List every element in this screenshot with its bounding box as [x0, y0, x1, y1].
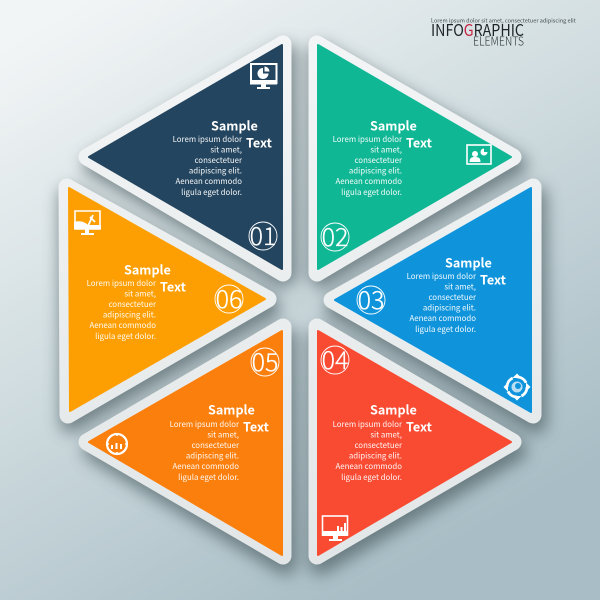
body text: [407, 271, 477, 335]
body text: consectetuer: [194, 155, 243, 166]
body text: Lorem ipsum dolor: [87, 278, 157, 289]
body text: sit amet,: [444, 282, 476, 293]
body text: Aenean commodo: [335, 176, 402, 187]
heading: Sample: [370, 116, 417, 134]
panel: 01 navy triangle: [87, 44, 283, 273]
body text: adipiscing elit.: [186, 451, 239, 462]
body text: [333, 134, 403, 198]
body text: Aenean commodo: [175, 176, 242, 187]
body text: sit amet,: [210, 145, 242, 156]
panel: 03 blue triangle: [332, 187, 533, 415]
header title: INFOGRAPHIC: [431, 17, 524, 41]
body text: [170, 419, 240, 483]
body text: ligula eget dolor.: [181, 187, 242, 198]
body text: Lorem ipsum dolor: [333, 134, 403, 145]
body text: consectetuer: [428, 292, 477, 303]
body text: [173, 134, 243, 198]
body text: [333, 419, 403, 483]
heading: Sample: [370, 400, 417, 418]
body text: ligula eget dolor.: [341, 472, 402, 483]
heading: Sample: [445, 252, 492, 272]
body text: Aenean commodo: [409, 313, 476, 324]
body text: consectetuer: [108, 299, 157, 310]
shadows: [70, 54, 536, 564]
body text: consectetuer: [192, 440, 240, 451]
center glow: [286, 286, 314, 314]
body text: consectetuer: [354, 155, 403, 166]
body text: ligula eget dolor.: [415, 324, 476, 335]
body text: adipiscing elit.: [103, 310, 156, 321]
icon: chart in circle: [106, 433, 128, 455]
panel: 05 orange triangle: Text: [243, 416, 270, 436]
number 05: 05: [252, 343, 278, 379]
icon: monitor with bars: [322, 516, 348, 541]
panel: 04 red triangle: Text: [406, 416, 433, 436]
body text: Aenean commodo: [89, 320, 156, 331]
body text: ligula eget dolor.: [341, 187, 402, 198]
body text: adipiscing elit.: [423, 303, 476, 314]
body text: sit amet,: [370, 145, 402, 156]
body text: Lorem ipsum dolor: [173, 134, 243, 145]
body text: ligula eget dolor.: [178, 472, 239, 483]
number 03: 03: [358, 281, 384, 317]
number 02: 02: [322, 218, 348, 254]
panel: 02 green triangle: [317, 44, 513, 273]
body text: adipiscing elit.: [189, 166, 242, 177]
heading: Sample: [124, 260, 171, 278]
header: [431, 16, 577, 50]
body text: adipiscing elit.: [349, 451, 402, 462]
body text: sit amet,: [207, 430, 239, 441]
body text: Aenean commodo: [335, 461, 402, 472]
panel: 05 orange triangle: [87, 327, 283, 556]
number 04: 04: [322, 341, 348, 377]
icon: monitor with pie chart: [250, 64, 277, 89]
body text: adipiscing elit.: [349, 166, 402, 177]
heading: Sample: [208, 400, 255, 418]
body text: consectetuer: [354, 440, 403, 451]
body text: Aenean commodo: [172, 461, 239, 472]
panel: 02 green triangle: Text: [406, 132, 433, 152]
header tagline: Lorem ipsum dolor sit amet, consectetuer adipiscing elit: [431, 16, 577, 24]
body text: Lorem ipsum dolor: [333, 419, 403, 430]
icon: cycle arrows: [504, 374, 530, 400]
panel: 04 red triangle: [317, 327, 513, 556]
heading: Sample: [211, 116, 258, 134]
panel: 06 amber triangle: [67, 187, 268, 415]
panel: 01 navy triangle: Text: [246, 132, 273, 152]
body text: ligula eget dolor.: [95, 331, 156, 342]
body text: sit amet,: [370, 430, 402, 441]
body text: Lorem ipsum dolor: [170, 419, 240, 430]
number 06: 06: [216, 280, 242, 316]
icon: monitor with arrow: [74, 211, 101, 235]
icon: presentation frame: [467, 145, 491, 164]
panel: 03 blue triangle: Text: [480, 270, 507, 288]
body text: Lorem ipsum dolor: [407, 271, 477, 282]
body text: sit amet,: [124, 289, 156, 300]
panel: 06 amber triangle: Text: [160, 276, 187, 296]
header subtitle: ELEMENTS: [473, 32, 524, 50]
number 01: 01: [250, 217, 276, 253]
body text: [87, 278, 157, 342]
